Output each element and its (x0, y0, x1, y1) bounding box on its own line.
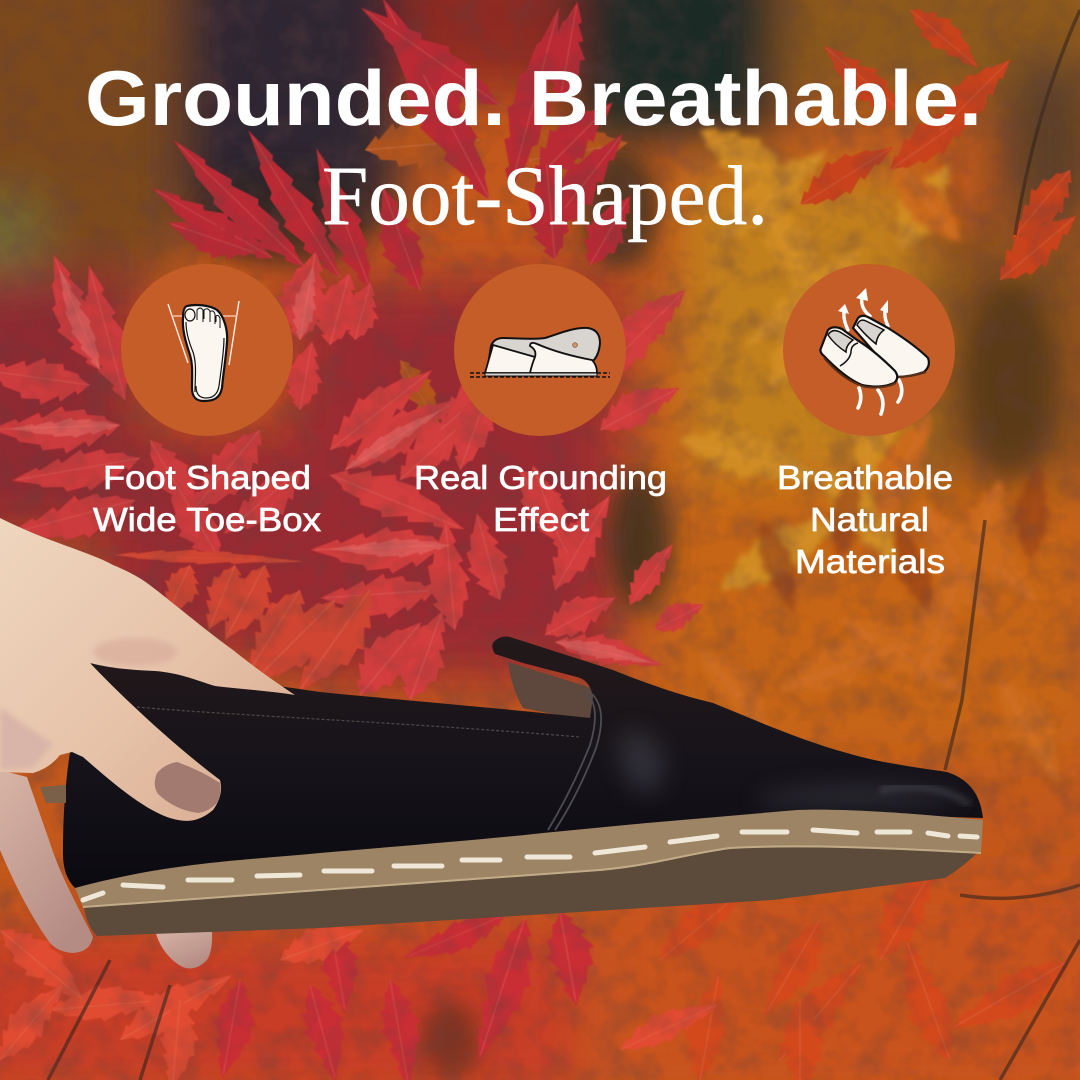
hand: palm, thumb and index finger (0, 518, 295, 821)
shoe (63, 636, 983, 936)
red leaves: lower (204, 902, 604, 1080)
icon: shoe on ground (454, 264, 626, 436)
heel hardware (40, 785, 66, 803)
label: breathable natural materials (777, 459, 953, 580)
title (85, 54, 982, 243)
shoe seam (548, 692, 601, 830)
finger under sole (155, 930, 212, 968)
title line: serif: Foot-Shaped. (322, 149, 768, 243)
icon: foot with wide toe box (121, 264, 293, 436)
label: real grounding effect: Effect (493, 501, 589, 538)
shoe lining (508, 662, 598, 722)
palm shadow (0, 707, 53, 770)
title line: sans: Grounded. Breathable. (85, 54, 982, 142)
sole rim (75, 810, 983, 907)
label: breathable natural materials: Breathable (777, 459, 953, 496)
feature: foot shaped (93, 264, 322, 538)
lower finger (0, 770, 93, 953)
shoe upper (63, 636, 983, 888)
label: foot shaped wide toe-box (93, 459, 322, 538)
feature: real grounding (414, 264, 667, 538)
label: breathable natural materials: Materials (795, 543, 945, 580)
red leaves: centre (270, 246, 710, 709)
thumb shadow (93, 638, 177, 666)
red leaves: upper fan (142, 0, 646, 298)
sole bottom (83, 840, 978, 936)
orange-brown leaf near title (362, 109, 632, 436)
shoe sheen (620, 730, 965, 807)
pale leaf highlights (10, 264, 655, 670)
icon: breathable shoes with airflow (783, 264, 955, 436)
label: foot shaped wide toe-box: Foot Shaped (103, 459, 311, 496)
label: breathable natural materials: Natural (810, 501, 929, 538)
stitches (83, 830, 977, 900)
fingernail (155, 762, 221, 813)
dark gaps (195, 165, 375, 265)
label: real grounding effect (414, 459, 667, 538)
red leaves: left (0, 247, 315, 572)
label: real grounding effect: Real Grounding (414, 459, 667, 496)
orange/yellow leaves right side (674, 107, 969, 609)
feature: breathable (777, 264, 955, 580)
label: foot shaped wide toe-box: Wide Toe-Box (93, 501, 322, 538)
